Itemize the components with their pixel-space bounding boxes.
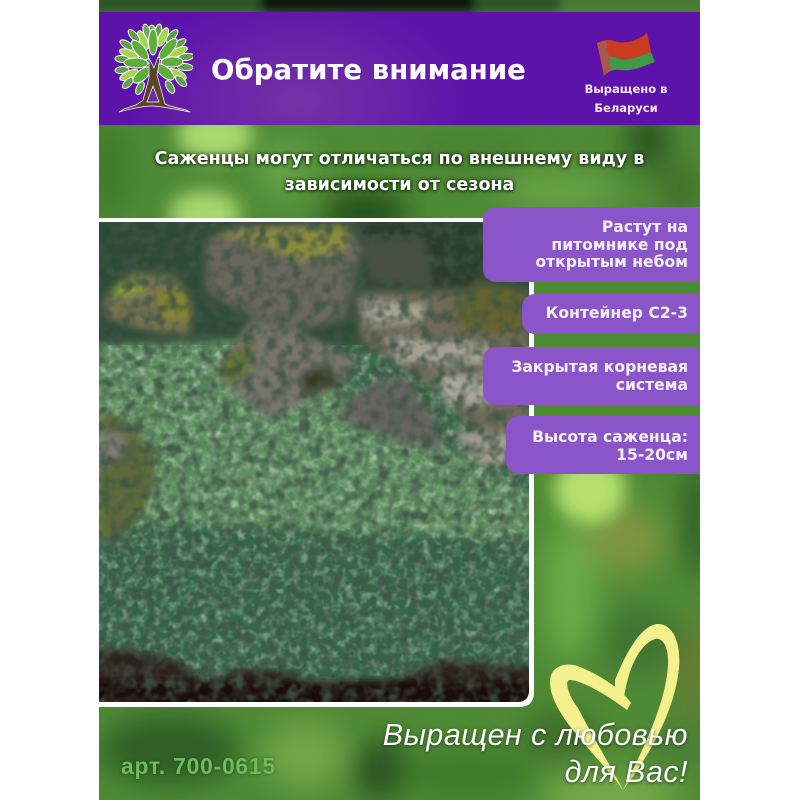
panel: height: 15-20см [616,446,688,464]
background with blurred green bokeh [99,0,700,800]
panel: root system: система [616,376,688,394]
slogan [382,718,688,789]
slogan: для Вас! [565,755,688,789]
panel: grown outdoors [483,207,700,282]
subtitle text [152,148,646,195]
panel: root system: Закрытая корневая [511,358,688,376]
panel: container: Контейнер С2-3 [546,304,688,322]
header band [99,12,700,125]
article number: арт. 700-0615 [121,753,276,779]
panel: height [506,416,700,474]
panel: container [522,294,700,334]
panel: height: Высота саженца: [532,428,688,446]
flag caption [585,82,667,115]
flag caption: Выращено в [585,82,667,96]
icon: flag of Belarus [597,33,655,76]
photo: rock garden with ground cover [99,218,534,707]
slogan: Выращен с любовью [383,718,688,752]
panel: grown outdoors: Растут на [602,218,688,236]
icon: yellow heart [550,624,680,790]
subtitle text: Саженцы могут отличаться по внешнему виду в [155,149,644,169]
logo: tree [114,24,193,112]
panel: root system [483,347,700,405]
flag caption: Беларуси [594,101,658,115]
subtitle text: зависимости от сезона [285,175,514,195]
panel: grown outdoors: открытым небом [535,253,688,271]
panel: grown outdoors: питомнике под [551,236,688,254]
title: Обратите внимание [211,53,526,86]
